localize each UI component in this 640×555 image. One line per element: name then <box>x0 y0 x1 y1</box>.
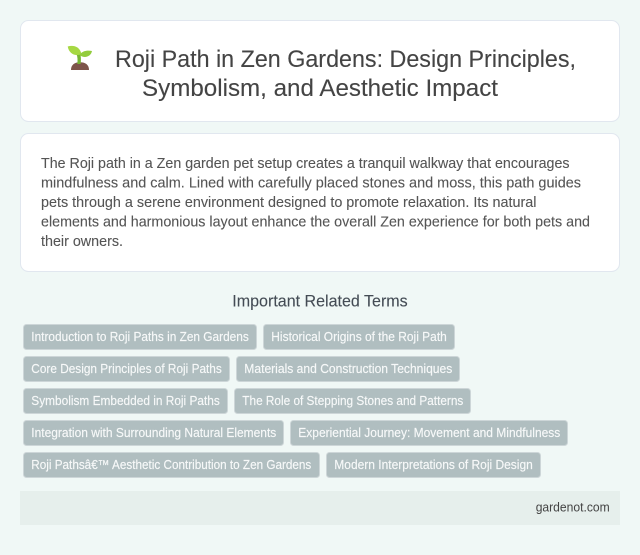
tag: Historical Origins of the Roji Path <box>271 329 447 344</box>
title: Symbolism, and Aesthetic Impact <box>142 75 498 102</box>
tag: Materials and Construction Techniques <box>244 361 452 376</box>
tag: The Role of Stepping Stones and Patterns <box>242 393 463 408</box>
footer <box>20 491 620 525</box>
tag <box>24 356 230 382</box>
text block: description: pets through a serene environment designed to promote relaxation. Its natural <box>41 194 536 211</box>
footer text: site name: gardenot.com <box>536 500 610 514</box>
panel: title card <box>20 20 620 122</box>
tag <box>234 388 470 414</box>
tag <box>24 452 320 478</box>
tag: Modern Interpretations of Roji Design <box>334 457 533 472</box>
panel: description card <box>20 134 620 272</box>
text block: description: mindfulness and calm. Lined with carefully placed stones and moss, this path guides <box>41 174 581 192</box>
tag <box>264 324 454 350</box>
tag <box>24 324 256 350</box>
tag <box>290 420 568 446</box>
title <box>115 46 576 102</box>
heading: important related terms: Important Related Terms <box>232 293 408 311</box>
tag <box>236 356 460 382</box>
text block: description <box>41 155 590 250</box>
icon: seedling <box>68 46 92 70</box>
tag: Core Design Principles of Roji Paths <box>31 361 222 376</box>
tag: Experiential Journey: Movement and Mindfulness <box>298 425 560 440</box>
title: Roji Path in Zen Gardens: Design Principles, <box>115 46 576 73</box>
text block: description: The Roji path in a Zen garden pet setup creates a tranquil walkway that encourages <box>41 155 570 172</box>
tag: Symbolism Embedded in Roji Paths <box>31 393 220 408</box>
tag: Introduction to Roji Paths in Zen Gardens <box>31 329 249 344</box>
text block: description: elements and harmonious layout enhance the overall Zen experience for both pets and <box>41 214 590 230</box>
tag <box>24 388 228 414</box>
tag <box>326 452 540 478</box>
text block: description: their owners. <box>41 233 123 250</box>
tag <box>24 420 284 446</box>
tag list: related terms <box>24 324 568 478</box>
tag: Integration with Surrounding Natural Elements <box>31 425 276 440</box>
tag: Roji Pathsâ€™ Aesthetic Contribution to Zen Gardens <box>31 457 311 472</box>
